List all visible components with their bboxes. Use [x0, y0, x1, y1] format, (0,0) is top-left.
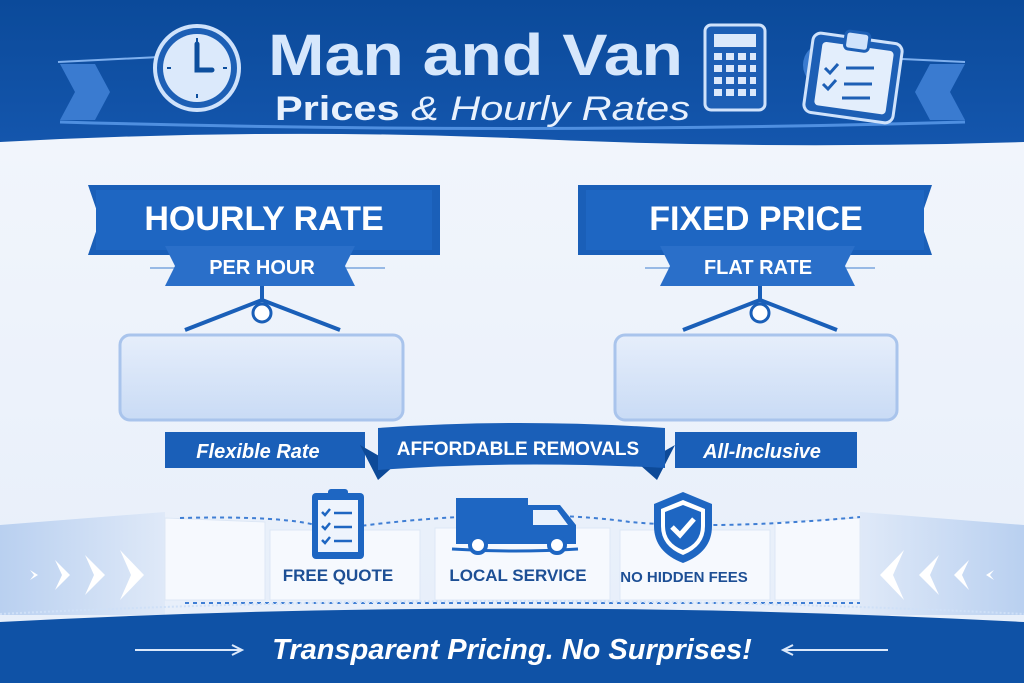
banner: hourly rate: [88, 185, 440, 255]
feature: free quote: FREE QUOTE: [283, 566, 393, 585]
title: [268, 23, 690, 128]
sub banner: flat rate: FLAT RATE: [704, 257, 812, 279]
arrow left: [135, 645, 242, 655]
feature: free quote: [283, 489, 393, 585]
ribbon: flexible rate: [165, 432, 365, 468]
banner: fixed price: [578, 185, 932, 255]
hanger: [683, 286, 837, 330]
feature: no hidden fees: [620, 492, 748, 586]
chevrons left: [30, 550, 144, 600]
decorative side chevrons in header: [60, 64, 965, 120]
footer band: [0, 601, 1024, 683]
arrow right: [783, 645, 888, 655]
tagline: Transparent Pricing. No Surprises!: [272, 634, 752, 666]
ribbon: affordable removals: [360, 423, 675, 480]
feature strip background: [0, 512, 1024, 615]
sub banner: per hour: PER HOUR: [209, 257, 315, 279]
icon: clipboard: [803, 31, 903, 124]
title: Man and Van: [268, 23, 683, 88]
empty price sign: [615, 335, 897, 420]
sub banner: flat rate: [645, 246, 875, 286]
ribbon: affordable removals: AFFORDABLE REMOVALS: [397, 439, 639, 460]
feature: local service: LOCAL SERVICE: [449, 566, 587, 585]
panel: hourly rate: [88, 185, 440, 420]
ribbon: flexible rate: Flexible Rate: [196, 441, 320, 463]
sub banner: per hour: [150, 246, 385, 286]
feature: no hidden fees: NO HIDDEN FEES: [620, 569, 748, 586]
banner: fixed price: FIXED PRICE: [649, 200, 863, 238]
banner: hourly rate: HOURLY RATE: [144, 200, 384, 238]
chevrons right: [880, 550, 994, 600]
icon: calculator: [705, 25, 765, 110]
feature: local service: [449, 498, 587, 585]
icon: clock: [155, 26, 239, 110]
title: Prices & Hourly Rates: [275, 90, 690, 128]
ribbon: all-inclusive: All-Inclusive: [702, 441, 821, 463]
ribbon: all-inclusive: [675, 432, 857, 468]
header band: [0, 0, 1024, 145]
panel: fixed price: [578, 185, 932, 420]
hanger: [185, 286, 340, 330]
empty price sign: [120, 335, 403, 420]
ribbon row: [165, 423, 857, 480]
